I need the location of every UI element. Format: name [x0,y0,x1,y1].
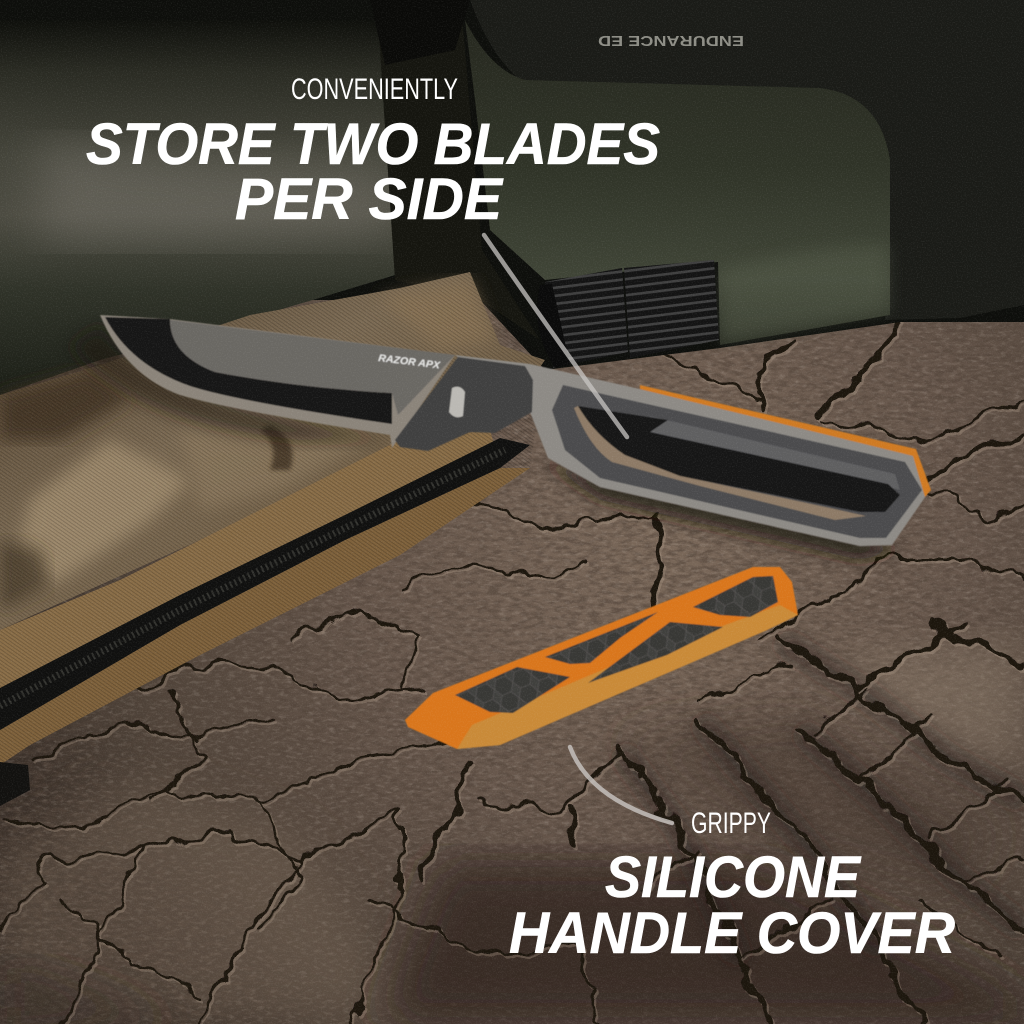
knife: dark inset [552,385,922,538]
heading: silicone handle cover [509,845,955,966]
knife: ground shadow [540,460,900,560]
knife: blade black coating [105,317,392,424]
bag: tan binding [0,430,500,690]
knife: blade logo: RAZOR APX [378,353,442,372]
knife: stored blade [578,406,900,512]
spotting scope [0,0,1024,395]
bag: light camo patch [10,440,190,590]
knife: orange edge [640,385,931,497]
scope: black strap [378,15,540,340]
cover: grip window 1 [455,667,570,713]
pointer line to silicone cover [570,747,672,823]
bag: zipper [0,438,530,730]
bag: dark fold [260,425,292,470]
heading: silicone handle cover: SILICONE [605,845,862,910]
heading: silicone handle cover: HANDLE COVER [509,901,955,966]
bag: right light camo patch [180,430,370,510]
knife: grip slot [449,387,465,417]
bag: small black zipper pull [0,762,30,806]
knife: blade [100,315,455,448]
bag: zipper teeth [0,450,505,706]
bag: shadow below blade [70,325,390,440]
scope: green body highlight [720,245,888,342]
scope: black housing [470,0,1024,320]
cover: lighter side face [457,605,798,749]
cover: grip window 3 [588,622,723,683]
cover: grip window 2 [545,612,658,664]
knife: upper grey bar [650,416,900,490]
scope: green body [465,20,890,345]
cover: grip window 4 [693,576,778,617]
heading: store two blades per side [86,112,660,232]
knife: stored blade tan edge [574,406,866,520]
bag: fabric weave [0,272,545,765]
heading: store two blades per side: STORE TWO BLADES [86,112,660,177]
scope: barrel highlight [40,140,395,243]
bag: camo fabric [0,272,545,630]
cover: orange top face [405,567,798,749]
bag: lower tan binding [0,468,530,765]
bag: lower dark camo patch [0,540,50,610]
label: conveniently: CONVENIENTLY [291,73,458,106]
knife: front grip [395,357,533,451]
camo bag with zipper [0,272,545,806]
knife [100,315,931,560]
label: grippy: GRIPPY [691,807,771,840]
knife: metal handle frame [455,355,930,546]
scope: top shadow [0,0,1024,370]
bag: upper patch [380,280,495,350]
scope: model label: ENDURANCE ED [598,32,744,49]
scope: left barrel [0,20,400,395]
scope: eyepiece ring [370,0,470,65]
heading: store two blades per side: PER SIDE [235,167,504,232]
bag: dark camo patch [0,370,130,440]
knife: blade grey flat [170,320,455,415]
scope: focus knob [537,260,719,368]
silicone handle cover [405,567,798,749]
pointer line to stored blades [484,235,627,437]
